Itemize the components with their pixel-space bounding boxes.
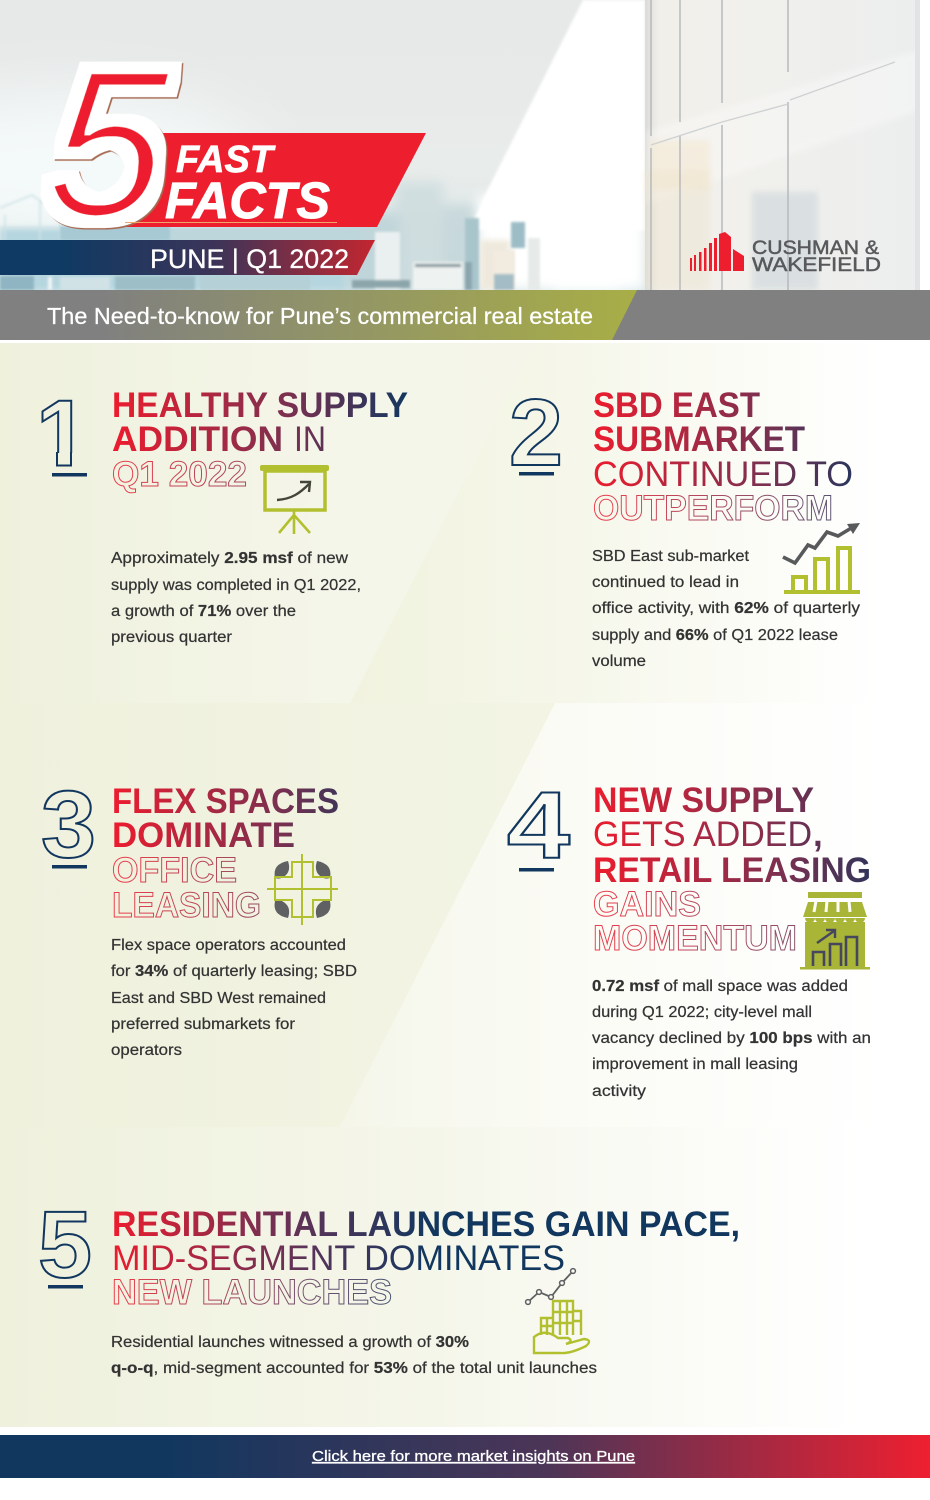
heading 2 [593, 386, 853, 528]
icon: red building bars [690, 232, 744, 271]
body text 2 [592, 548, 860, 670]
panel: fact 1 [36, 381, 408, 646]
body text 2: office activity, with 62% of quarterly [592, 600, 860, 617]
panel: fact 2 [509, 380, 860, 670]
number 1 [42, 400, 87, 476]
body text 1 [111, 550, 361, 646]
body text 3: Flex space operators accounted [111, 937, 346, 954]
red banner [100, 133, 426, 227]
icon: retail store [800, 892, 870, 970]
title bar: Pune Q1 2022: PUNE | Q1 2022 [150, 244, 349, 274]
body text 3: for 34% of quarterly leasing; SBD [111, 963, 357, 980]
heading 2: OUTPERFORM [593, 489, 833, 528]
logo: Cushman and Wakefield: CUSHMAN & [752, 237, 879, 259]
heading 3: DOMINATE [112, 816, 295, 855]
body text 4 [592, 978, 871, 1100]
subtitle band: The Need-to-know for Pune’s commercial real estate [47, 303, 593, 329]
heading 4 [593, 781, 871, 958]
panel: fact 4 [507, 773, 871, 1100]
body background panels [0, 343, 930, 1427]
heading 3: OFFICE [112, 851, 237, 890]
footer link bar: Click here for more market insights on Pune [312, 1448, 635, 1465]
number 3: 3 [41, 772, 96, 878]
FAST: FAST [176, 139, 276, 181]
heading 1 [112, 386, 408, 494]
body text 3: East and SBD West remained [111, 990, 326, 1007]
body text 4: improvement in mall leasing [592, 1056, 798, 1073]
body text 3: preferred submarkets for [111, 1016, 295, 1033]
body text 3 [111, 937, 357, 1059]
body text 2: supply and 66% of Q1 2022 lease [592, 627, 838, 644]
icon: residential building in hand [526, 1269, 589, 1353]
heading 4: NEW SUPPLY [593, 781, 814, 820]
body text 3: operators [111, 1042, 182, 1059]
heading 4: RETAIL LEASING [593, 851, 871, 890]
body text 2: volume [592, 653, 646, 670]
heading 3: LEASING [112, 886, 261, 925]
icon: presentation board [260, 465, 329, 534]
body text 5: q-o-q, mid-segment accounted for 53% of the total unit launches [111, 1360, 597, 1377]
subtitle band [0, 290, 930, 340]
heading 2: SUBMARKET [593, 420, 805, 459]
body text 2: continued to lead in [592, 574, 739, 591]
icon: growth bars [783, 523, 860, 592]
body text 4: during Q1 2022; city-level mall [592, 1004, 812, 1021]
heading 3: FLEX SPACES [112, 782, 339, 821]
heading 1: IN [294, 420, 326, 459]
heading 4: , [813, 815, 823, 854]
body text 2: SBD East sub-market [592, 548, 750, 565]
heading 1: ADDITION [112, 420, 283, 459]
heading 1: HEALTHY SUPPLY [112, 386, 408, 425]
heading 4: MOMENTUM [593, 919, 797, 958]
body text 5 [111, 1334, 597, 1377]
heading 5: MID-SEGMENT DOMINATES [112, 1239, 565, 1278]
panel: fact 3 [41, 772, 357, 1059]
number 4: 4 [507, 773, 570, 879]
body text 4: vacancy declined by 100 bps with an [592, 1030, 871, 1047]
heading 4: GETS ADDED [593, 815, 812, 854]
number 1: 1 [36, 381, 89, 487]
body text 1: a growth of 71% over the [111, 603, 296, 620]
icon: flex space floor plan [267, 854, 338, 925]
heading 2: SBD EAST [593, 386, 760, 425]
large numeral 5: 5 [41, 26, 175, 261]
panel: fact 5 [38, 1192, 740, 1377]
title bar: Pune Q1 2022 [0, 240, 375, 275]
footer link bar [0, 1435, 930, 1478]
heading 4: GAINS [593, 885, 701, 924]
heading 2: CONTINUED TO [593, 455, 853, 494]
header photo background [0, 0, 920, 290]
body text 1: Approximately 2.95 msf of new [111, 550, 349, 567]
heading 1: Q1 2022 [112, 455, 247, 494]
body text 4: activity [592, 1083, 646, 1100]
heading 5: NEW LAUNCHES [112, 1273, 392, 1312]
heading 5 [112, 1205, 740, 1312]
number 2: 2 [509, 380, 563, 486]
body text 1: supply was completed in Q1 2022, [111, 577, 361, 594]
logo: 5 Fast Facts [41, 26, 426, 261]
logo: Cushman and Wakefield [690, 232, 881, 276]
logo: Cushman and Wakefield: WAKEFIELD [752, 254, 881, 276]
FACTS: FACTS [165, 172, 330, 229]
heading 3 [112, 782, 339, 925]
number 5: 5 [38, 1192, 92, 1298]
body text 1: previous quarter [111, 629, 232, 646]
body text 5: Residential launches witnessed a growth of 30% [111, 1334, 469, 1351]
heading 5: RESIDENTIAL LAUNCHES GAIN PACE, [112, 1205, 740, 1244]
body text 4: 0.72 msf of mall space was added [592, 978, 848, 995]
